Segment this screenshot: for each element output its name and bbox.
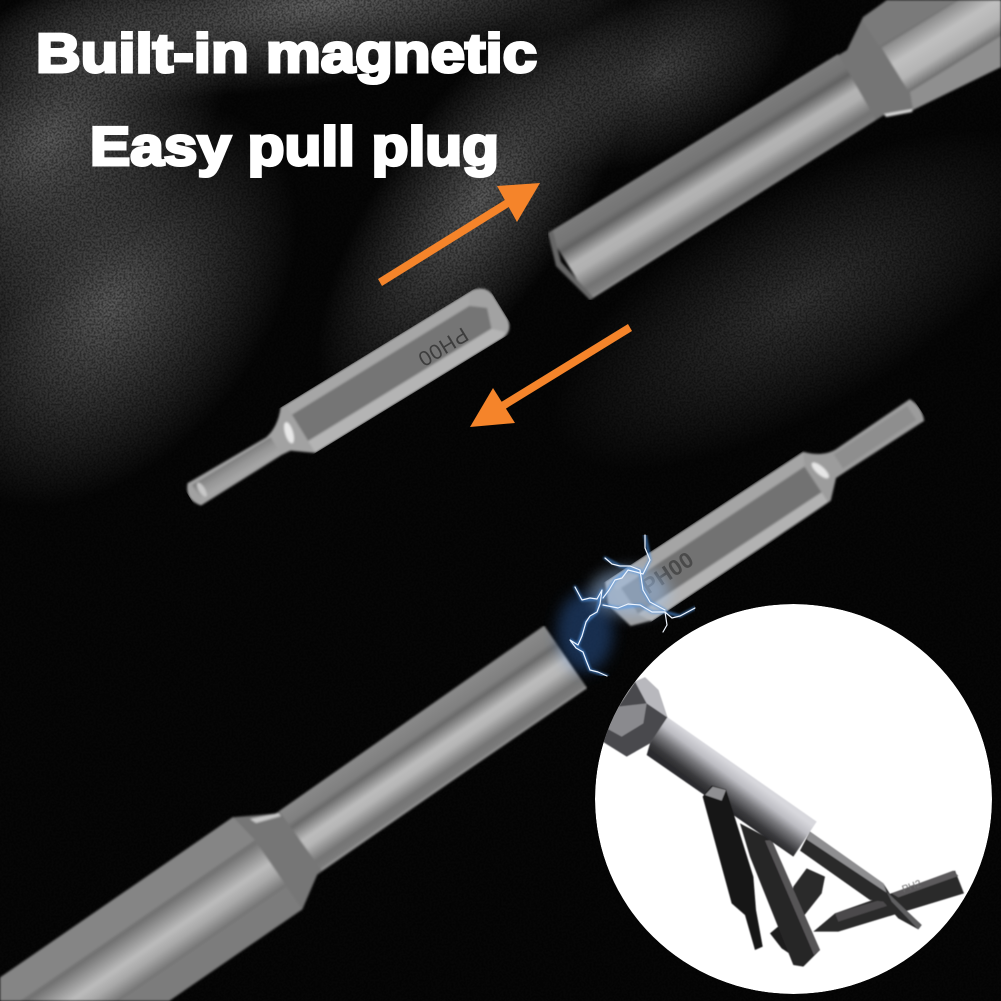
- orange arrow pointing to handle: [378, 183, 540, 286]
- screwdriver handle, lower left: [0, 626, 587, 1001]
- engraved label on attached bit: PH00: [637, 546, 698, 599]
- inset: short dark bit: [792, 868, 825, 917]
- screwdriver handle, upper right: [548, 0, 1001, 300]
- inset: engraved label: PH2: [901, 878, 923, 895]
- inset: silver handle shaft: [647, 717, 817, 857]
- orange arrow pointing to bit: [470, 324, 632, 427]
- inset: screwdriver held bits: [600, 677, 964, 967]
- inset circle photo of magnetised bits: [595, 604, 992, 994]
- inset: handle collar: [600, 677, 667, 757]
- detached PH00 bit: [174, 282, 515, 521]
- engraved label on detached bit: PH00: [413, 323, 472, 371]
- headline line one: Built-in magnetic: [36, 22, 537, 84]
- title: two headline lines: [36, 22, 537, 177]
- headline line two: Easy pull plug: [90, 115, 499, 177]
- inset: angled hex bit: [740, 823, 820, 967]
- inset: hex bit behind, lying flat: [813, 871, 964, 932]
- electric spark between handle and bit: [557, 535, 695, 676]
- inset: bit inserted in handle: [800, 832, 922, 929]
- inset: hex bit with thin tip: [703, 786, 763, 950]
- attached PH00 bit: [597, 384, 936, 636]
